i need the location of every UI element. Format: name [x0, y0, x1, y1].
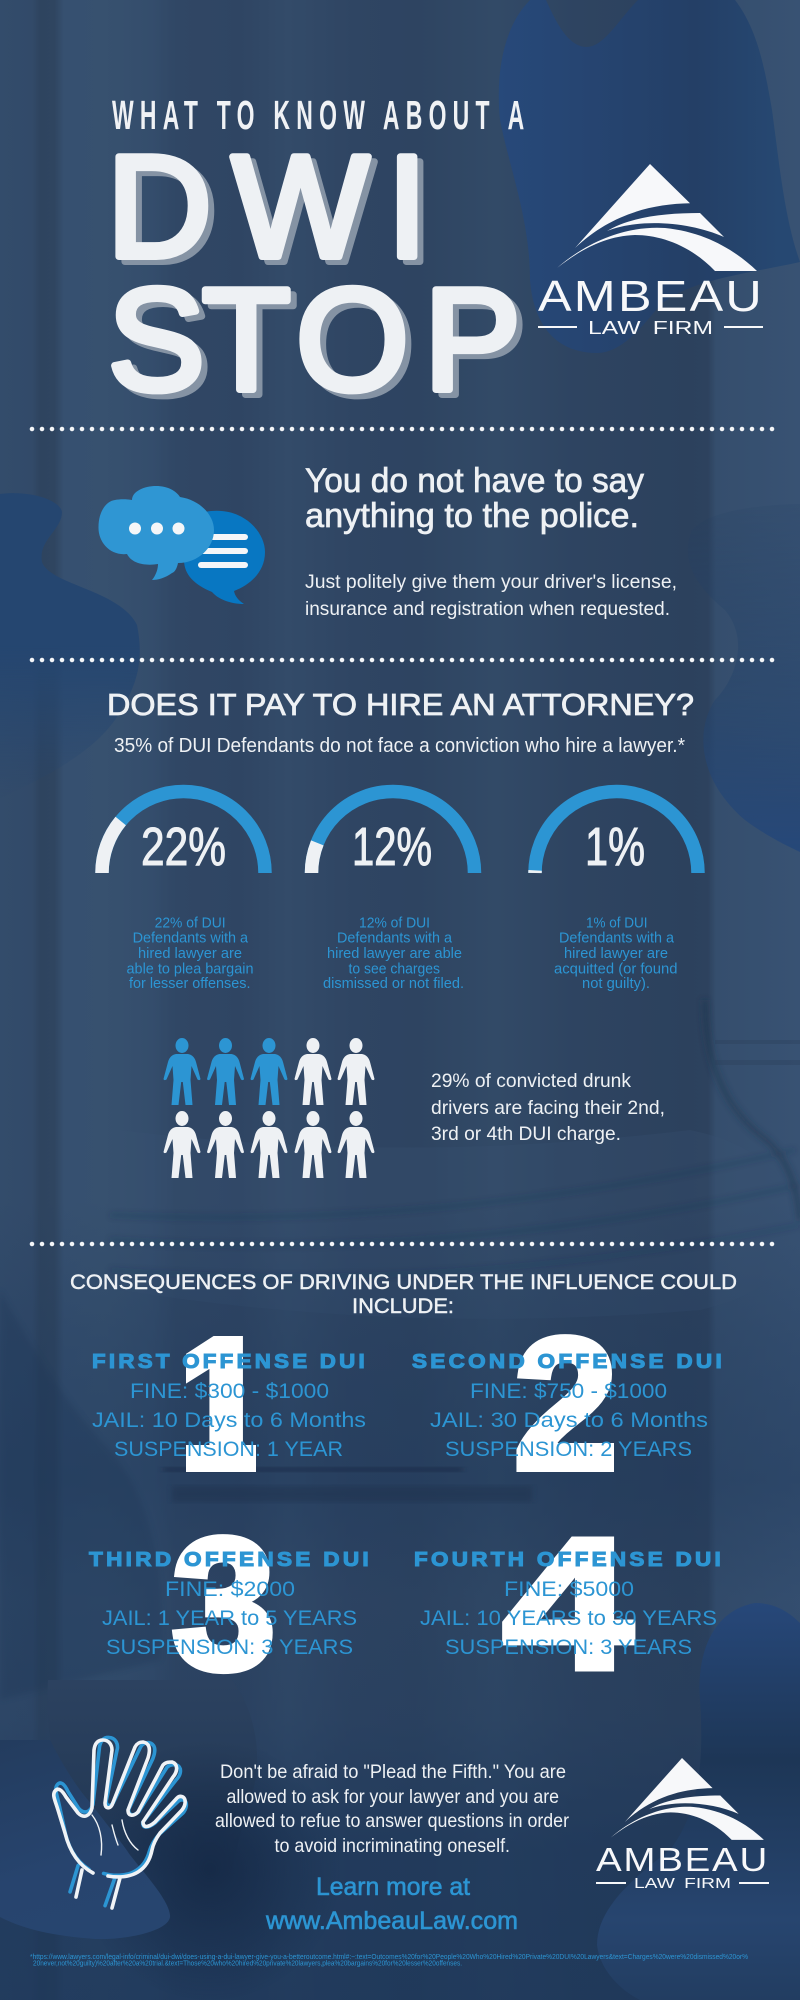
caption: 22%: Defendants with a: [133, 930, 249, 946]
decorative blob: right: [688, 504, 800, 852]
title shadow layer: DWI: [113, 130, 433, 292]
heading: does it pay: DOES IT PAY TO HIRE AN ATTORNEY?: [107, 687, 694, 722]
caption: 1%: [554, 916, 678, 992]
divider: [32, 658, 773, 662]
gauge: 1%: [535, 792, 698, 877]
title shadow layer: [113, 130, 527, 426]
gauge: 22%: [102, 792, 265, 877]
caption: 12%: dismissed or not filed.: [323, 976, 464, 992]
panel: third offense: JAIL: 1 YEAR to 5 YEARS: [102, 1607, 357, 1630]
panel: do not have to say anything: [305, 462, 677, 620]
heading: consequences: INCLUDE:: [352, 1295, 454, 1318]
panel: third offense: [89, 1548, 372, 1659]
caption: 1%: not guilty).: [582, 976, 650, 992]
panel: fourth offense: FINE: $5000: [504, 1578, 634, 1601]
text: plead the fifth: allowed to refue to answer questions in order: [215, 1810, 569, 1832]
heading: anything to the police.: [305, 497, 639, 535]
heading: consequences: [70, 1271, 737, 1318]
gauge: 1%: 1%: [585, 817, 645, 877]
large numeral 4: 4: [503, 1499, 632, 1708]
pictogram: 3 of 10 people highlighted: [164, 1038, 374, 1178]
panel: third offense: THIRD OFFENSE DUI: [89, 1548, 372, 1571]
gauge: 12%: [312, 792, 474, 877]
text: plead the fifth: allowed to ask for your lawyer and you are: [226, 1786, 559, 1808]
decorative blob: behind hand: [0, 1740, 170, 1939]
panel: third offense: SUSPENSION: 3 YEARS: [106, 1636, 353, 1659]
panel: third offense: FINE: $2000: [165, 1578, 295, 1601]
divider: [32, 427, 773, 431]
panel: second offense: FINE: $750 - $1000: [470, 1380, 667, 1403]
caption: 22%: [126, 916, 254, 992]
panel: first offense: SUSPENSION: 1 YEAR: [114, 1438, 343, 1461]
caption: 22%: hired lawyer are: [138, 946, 242, 962]
icon: raised hand: [47, 1734, 191, 1911]
panel: second offense: SECOND OFFENSE DUI: [412, 1350, 725, 1373]
title face layer: STOP: [108, 258, 521, 420]
caption: 12%: to see charges: [348, 962, 440, 978]
decorative blob: patch above hand: [47, 1680, 257, 1880]
caption: 1%: 1% of DUI: [586, 916, 648, 932]
heading: consequences: CONSEQUENCES OF DRIVING UNDER THE INFLUENCE COULD: [70, 1271, 737, 1294]
body text: insurance and registration when requested.: [305, 598, 670, 620]
caption: 12%: Defendants with a: [337, 930, 453, 946]
logo: Ambeau Law Firm (header): [538, 164, 764, 338]
caption: 1%: hired lawyer are: [564, 946, 668, 962]
panel: second offense: SUSPENSION: 2 YEARS: [445, 1438, 692, 1461]
footnote source: 20never,not%20guilty)%20after%20a%20trial.&text=Those%20who%20hired%20private%20lawyers,plea%20bargains%20for%20lesser%20offenses.: [33, 1960, 462, 1968]
title face layer: DWI: [107, 126, 427, 288]
text: plead the fifth: Don't be afraid to "Plead the Fifth." You are: [220, 1761, 566, 1783]
decorative shade: behind speech text: [80, 1740, 340, 2000]
caption: 22%: 22% of DUI: [155, 916, 226, 932]
gauge: 22%: 22%: [141, 817, 226, 877]
body text: Just politely give them your driver's license,: [305, 571, 677, 593]
panel: fourth offense: JAIL: 10 YEARS to 30 YEARS: [420, 1607, 717, 1630]
logo: Ambeau Law Firm (header): LAW FIRM: [588, 317, 713, 338]
icon: speech bubbles: [98, 486, 265, 604]
heading: [305, 462, 644, 535]
panel: fourth offense: FOURTH OFFENSE DUI: [414, 1548, 724, 1571]
caption: 1%: acquitted (or found: [554, 962, 678, 978]
gauge: 12%: 12%: [352, 817, 432, 877]
caption: 12%: hired lawyer are able: [327, 946, 462, 962]
footnote source: [30, 1954, 748, 1968]
text: plead the fifth: [215, 1761, 569, 1857]
panel: fourth offense: [414, 1548, 724, 1659]
body text: [305, 571, 677, 620]
text: plead the fifth: to avoid incriminating oneself.: [274, 1835, 510, 1857]
subheading: 35% of DUI Defendants do not face a conviction who hire a lawyer.*: [114, 735, 685, 757]
decorative blob: top right: [499, 0, 800, 353]
panel: first offense: FIRST OFFENSE DUI: [92, 1350, 368, 1373]
large numeral 3: 3: [172, 1501, 275, 1708]
heading: You do not have to say: [305, 462, 644, 500]
logo: Ambeau Law Firm (footer): AMBEAU: [596, 1841, 769, 1878]
divider: [32, 1242, 773, 1246]
large numeral 1: 1: [170, 1301, 273, 1508]
panel: first offense: JAIL: 10 Days to 6 Months: [92, 1409, 366, 1432]
footnote source: *https://www.lawyers.com/legal-info/criminal/dui-dwi/does-using-a-dui-lawyer-give-you-a-betteroutcome.html#:~:text=Outcomes%20for%20People%20Who%20Hired%20Private%20DUI%20Lawyers&text=Charges%20were%20dismissed%20or%: [30, 1954, 748, 1961]
call to action: learn more: [265, 1873, 518, 1935]
text: 29% of convicted drunk drivers: 3rd or 4th DUI charge.: [431, 1123, 621, 1145]
caption: 12%: 12% of DUI: [359, 916, 430, 932]
title: DWI STOP: [107, 126, 527, 426]
logo: Ambeau Law Firm (footer): [596, 1758, 769, 1892]
decorative blob: bottom right: [597, 1603, 800, 2000]
panel: second offense: [412, 1350, 725, 1461]
caption: 22%: able to plea bargain: [126, 962, 254, 978]
text: 29% of convicted drunk drivers: 29% of convicted drunk: [431, 1070, 631, 1092]
title kicker: WHAT TO KNOW ABOUT A: [112, 93, 524, 139]
caption: 1%: Defendants with a: [559, 930, 675, 946]
logo: Ambeau Law Firm (footer): LAW FIRM: [634, 1876, 731, 1892]
text: 29% of convicted drunk drivers: drivers are facing their 2nd,: [431, 1097, 665, 1119]
logo: Ambeau Law Firm (header): AMBEAU: [538, 272, 764, 321]
call to action: learn more: www.AmbeauLaw.com: [265, 1907, 518, 1935]
text: 29% of convicted drunk drivers: [431, 1070, 665, 1145]
title shadow layer: STOP: [114, 264, 527, 426]
panel: first offense: [92, 1350, 368, 1461]
decorative blob: left: [0, 493, 140, 798]
large numeral 2: 2: [514, 1301, 617, 1508]
panel: second offense: JAIL: 30 Days to 6 Months: [430, 1409, 708, 1432]
title face layer: [107, 126, 521, 420]
caption: 22%: for lesser offenses.: [129, 976, 250, 992]
call to action: learn more: Learn more at: [316, 1873, 470, 1901]
panel: fourth offense: SUSPENSION: 3 YEARS: [445, 1636, 692, 1659]
panel: first offense: FINE: $300 - $1000: [130, 1380, 329, 1403]
caption: 12%: [323, 916, 464, 992]
